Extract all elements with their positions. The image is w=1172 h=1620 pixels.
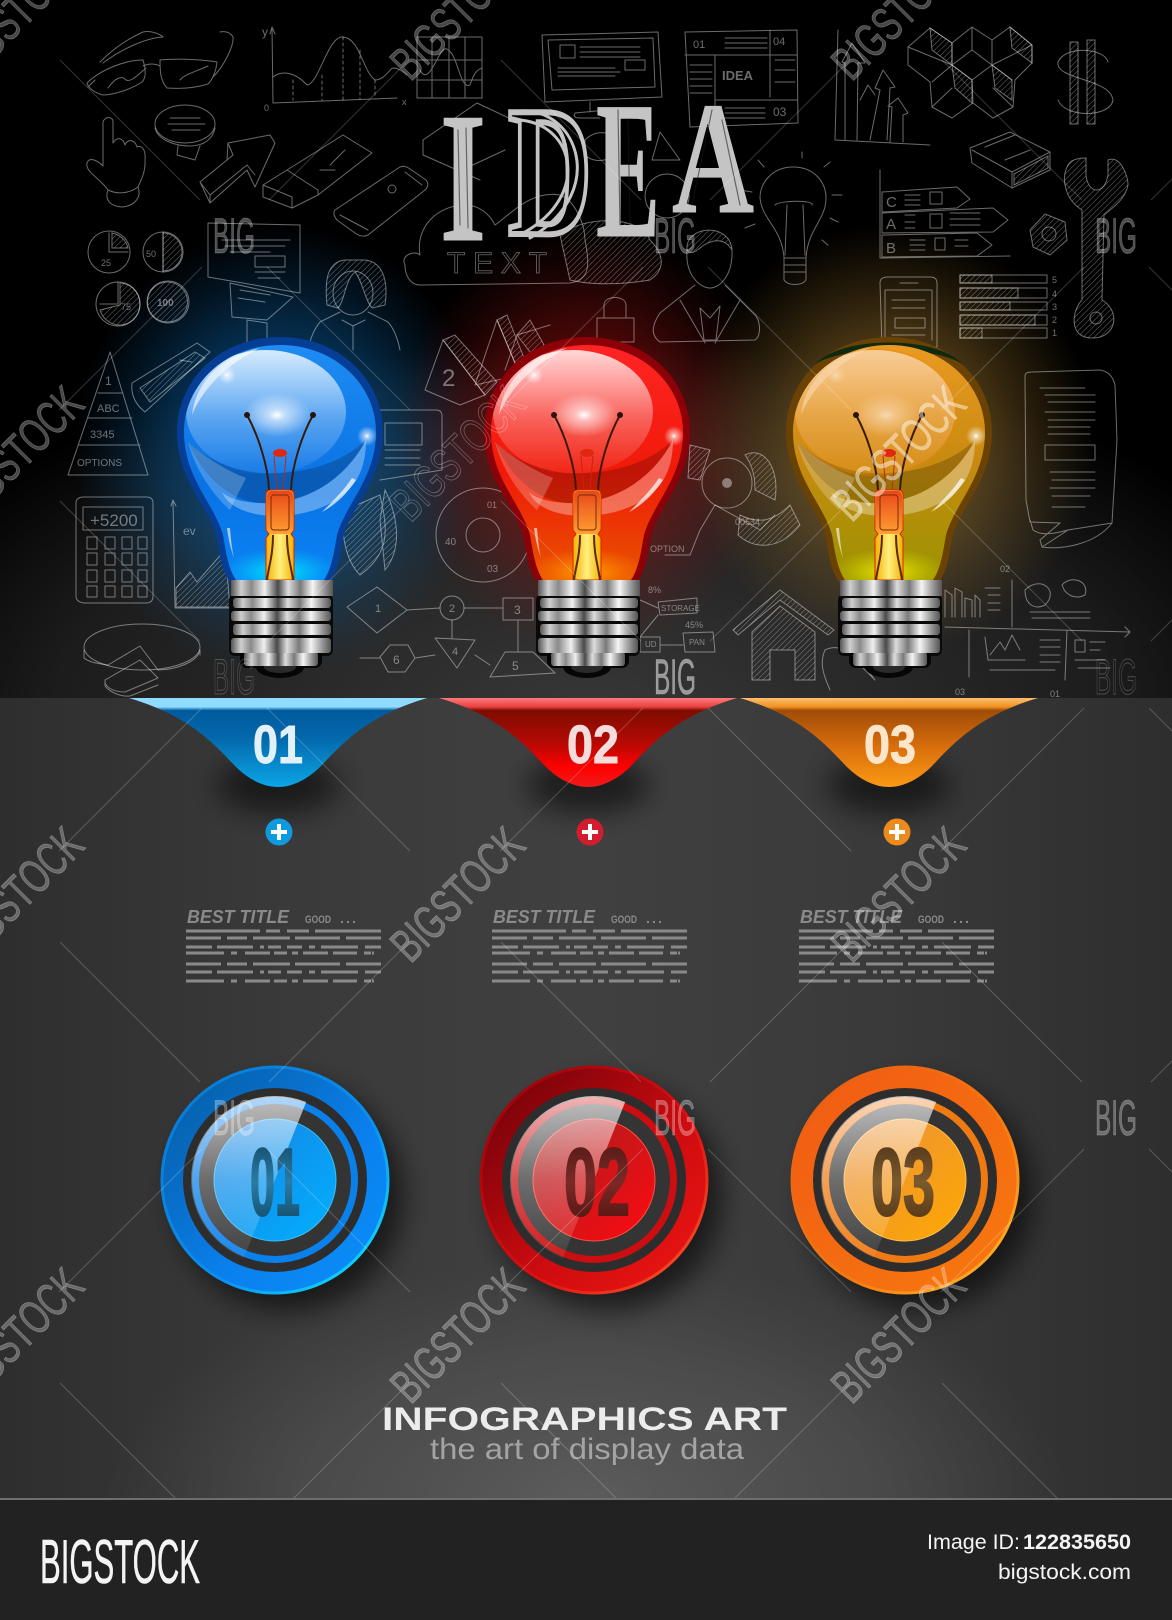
doodle: usb stick [263, 135, 372, 208]
doodle: grid chart [417, 37, 482, 98]
lower dark panel [0, 698, 1172, 1498]
doodle: pyramid [68, 352, 148, 475]
light bulb: blue [177, 337, 383, 678]
doodle: storage boxes: STORAGE [661, 604, 700, 613]
text block: 03 [799, 907, 994, 981]
watermark: BIGSTOCK repeated: BIGSTOCK [381, 1259, 535, 1413]
doodle: monitor chart [380, 410, 442, 480]
doodle: pyramid: 3345 [90, 429, 114, 441]
doodle: progress bars: 4 [1052, 289, 1057, 299]
bulb glows [75, 225, 1094, 675]
image id: 122835650 [1023, 1531, 1131, 1554]
doodle: hexagon cubes [908, 27, 1032, 118]
text block: 01: BEST TITLE [187, 907, 290, 927]
doodle: idea panel: 03 [773, 105, 787, 119]
doodle: bar chevrons: A [886, 216, 896, 233]
doodle: pie disc [84, 624, 200, 696]
doodle: dollar sign [1058, 40, 1113, 124]
doodle: storage boxes: 8% [648, 585, 661, 595]
watermark: BIGSTOCK repeated: BIGSTOCK [822, 818, 976, 972]
doodle: pyramid: OPTIONS [77, 458, 122, 469]
doodle: pie charts: 25 [101, 258, 111, 268]
light bulb: orange [786, 337, 992, 678]
doodle: calculator [76, 497, 153, 603]
doodle: pie charts: 100 [157, 298, 174, 309]
doodle: flow chart: 2 [449, 603, 455, 615]
badge: 03: 03 [871, 1129, 935, 1236]
doodle: hex nut [1030, 214, 1067, 255]
text block: 03: BEST TITLE [800, 907, 903, 927]
doodle: bar chevrons: C [886, 194, 897, 211]
doodle: storage boxes: PAN [689, 638, 705, 647]
watermark: BIGSTOCK repeated: BIGSTOCK [381, 377, 535, 531]
doodle: gear chart: OPTION [650, 544, 685, 554]
doodle: idea cloud [404, 194, 661, 285]
watermark: BIGSTOCK repeated: BIGSTOCK [381, 818, 535, 972]
doodle: rising area chart: ev [183, 524, 196, 538]
doodle: flow chart [347, 587, 555, 677]
doodle: arrow [200, 135, 275, 203]
doodle: bar chevrons: B [886, 240, 896, 257]
doodle: idea panel: 01 [693, 39, 705, 51]
doodle: arrow chart [835, 30, 930, 145]
doodle: line chart: 0 [264, 103, 269, 113]
doodle: businessman [653, 230, 760, 343]
doodle: gear chart [650, 445, 800, 555]
doodle: large speech note [1025, 370, 1117, 548]
footer logo: BIGSTOCK [40, 1528, 200, 1597]
doodle: progress bars: 3 [1052, 302, 1057, 312]
text block: 03: GOOD [918, 914, 944, 926]
title: infographics art: INFOGRAPHICS ART [382, 1401, 788, 1437]
doodle: line chart [262, 25, 407, 113]
tag: 03 [740, 698, 1038, 813]
watermark: BIG repeated: BIG [654, 649, 696, 705]
doodle: report layout: 03 [955, 687, 965, 697]
doodle: report layout: 02 [1000, 564, 1010, 574]
IDEA sketch scribbles [458, 110, 740, 238]
footer bar [0, 1498, 1172, 1620]
image id: Image ID: [927, 1531, 1020, 1554]
watermark: BIGSTOCK repeated [0, 0, 976, 1413]
doodle: progress bars: 1 [1052, 328, 1057, 338]
doodle: glasses [87, 31, 233, 95]
badge: 02 [481, 1067, 722, 1310]
doodle: line chart: x [402, 97, 407, 107]
subtitle: the art of display data [430, 1433, 744, 1466]
doodle: flow chart: 3 [514, 603, 521, 617]
IDEA sketched title [440, 62, 754, 281]
doodle: projector box [423, 103, 513, 180]
doodle: book box [970, 132, 1050, 188]
doodle: disc chart: 40 [445, 537, 457, 548]
watermark: BIG repeated: BIG [654, 208, 696, 264]
doodle: house [733, 590, 834, 680]
doodle: storage boxes [640, 585, 715, 652]
watermark: BIG repeated [213, 208, 1137, 1146]
IDEA sketched title: A [672, 69, 754, 247]
tag: 01: 01 [253, 715, 303, 775]
image id [927, 1531, 1131, 1584]
doodle: doodle light bulb [740, 152, 842, 284]
doodle: idea panel: 04 [773, 36, 785, 48]
watermark: BIG repeated: BIG [213, 208, 255, 264]
icon: plus orange [884, 818, 910, 846]
watermark: BIG repeated: BIG [213, 1090, 255, 1146]
light bulb: red [484, 337, 690, 678]
doodle: progress bars [960, 275, 1057, 338]
doodle: flow chart: 1 [375, 603, 381, 615]
icon: plus red [576, 818, 604, 846]
doodle: disc chart [436, 488, 530, 582]
doodle: pie charts: 50 [146, 249, 156, 259]
doodle: storage boxes: 45% [685, 620, 703, 630]
doodle: disc chart: 01 [487, 500, 497, 510]
badge: 02: 02 [564, 1129, 630, 1236]
doodle: phone [334, 166, 428, 236]
doodle: report layout [945, 564, 1130, 699]
doodle: numbered sails: 2 [442, 365, 455, 392]
doodle: flow chart: 4 [452, 646, 458, 658]
doodle: flow chart: 5 [512, 659, 519, 673]
tag: 02 [439, 698, 737, 813]
tag: 03: 03 [864, 715, 916, 775]
text block: 01: GOOD [305, 914, 331, 926]
doodle: pie charts [88, 231, 189, 326]
doodle: report layout: 01 [1050, 689, 1060, 699]
doodle: 3d bar [132, 343, 210, 412]
doodle: pointing hand [87, 118, 145, 207]
doodle: speech bubble [155, 105, 215, 160]
doodle: idea panel [685, 30, 798, 127]
doodle: disc chart: 03 [487, 564, 499, 575]
watermark: BIGSTOCK repeated: BIGSTOCK [822, 1259, 976, 1413]
doodle: progress bars: 5 [1052, 275, 1057, 285]
doodle: woman portrait [308, 260, 400, 350]
doodle: calculator: +5200 [90, 511, 138, 530]
doodle: monitor [542, 32, 662, 118]
icon: plus blue [266, 818, 292, 846]
tag: 01 [129, 698, 427, 813]
doodle: idea panel: IDEA [722, 68, 754, 83]
doodle: progress bars: 2 [1052, 315, 1057, 325]
text block: 01 [186, 907, 381, 981]
text block: 02: ... [646, 910, 662, 926]
doodle: flow chart: 6 [393, 653, 400, 667]
image id: bigstock.com [998, 1561, 1131, 1584]
doodle: clock [822, 648, 875, 690]
watermark: BIGSTOCK repeated: BIGSTOCK [822, 377, 976, 531]
text block: 02: GOOD [611, 914, 637, 926]
doodle: storage boxes: UD [645, 640, 657, 649]
tag: 02: 02 [567, 715, 619, 775]
doodle: bar chevrons [880, 170, 1010, 258]
sketch doodles [68, 25, 1130, 699]
doodle: numbered sails [425, 315, 550, 405]
badge: 01 [162, 1067, 403, 1310]
text block: 02 [492, 907, 687, 981]
IDEA sketched title: I [440, 75, 486, 281]
IDEA sketched title: E [596, 62, 660, 279]
doodle: pyramid: ABC [97, 403, 120, 415]
doodle: lock and shapes [585, 132, 689, 342]
top doodle background [0, 0, 1172, 698]
watermark: BIG repeated: BIG [213, 649, 255, 705]
text block: 01: ... [340, 910, 356, 926]
badge: 03 [792, 1067, 1033, 1310]
doodle: idea cloud: TEXT [447, 247, 547, 280]
doodle: rising area chart [171, 500, 230, 608]
IDEA sketched title: D [508, 69, 592, 275]
doodle: wrench [1064, 158, 1128, 338]
doodle: smartphone [880, 277, 937, 347]
doodle: area pie blue side [343, 490, 397, 575]
doodle: gear chart: 00534 [735, 517, 760, 527]
text block: 02: BEST TITLE [493, 907, 596, 927]
doodle: pie charts: 75 [121, 302, 131, 312]
doodle: document [208, 223, 300, 350]
doodle: line chart: y [262, 25, 268, 39]
badge: 01: 01 [250, 1129, 300, 1236]
text block: 03: ... [953, 910, 969, 926]
doodle: pyramid: 1 [105, 374, 112, 388]
watermark: BIG repeated: BIG [654, 1090, 696, 1146]
